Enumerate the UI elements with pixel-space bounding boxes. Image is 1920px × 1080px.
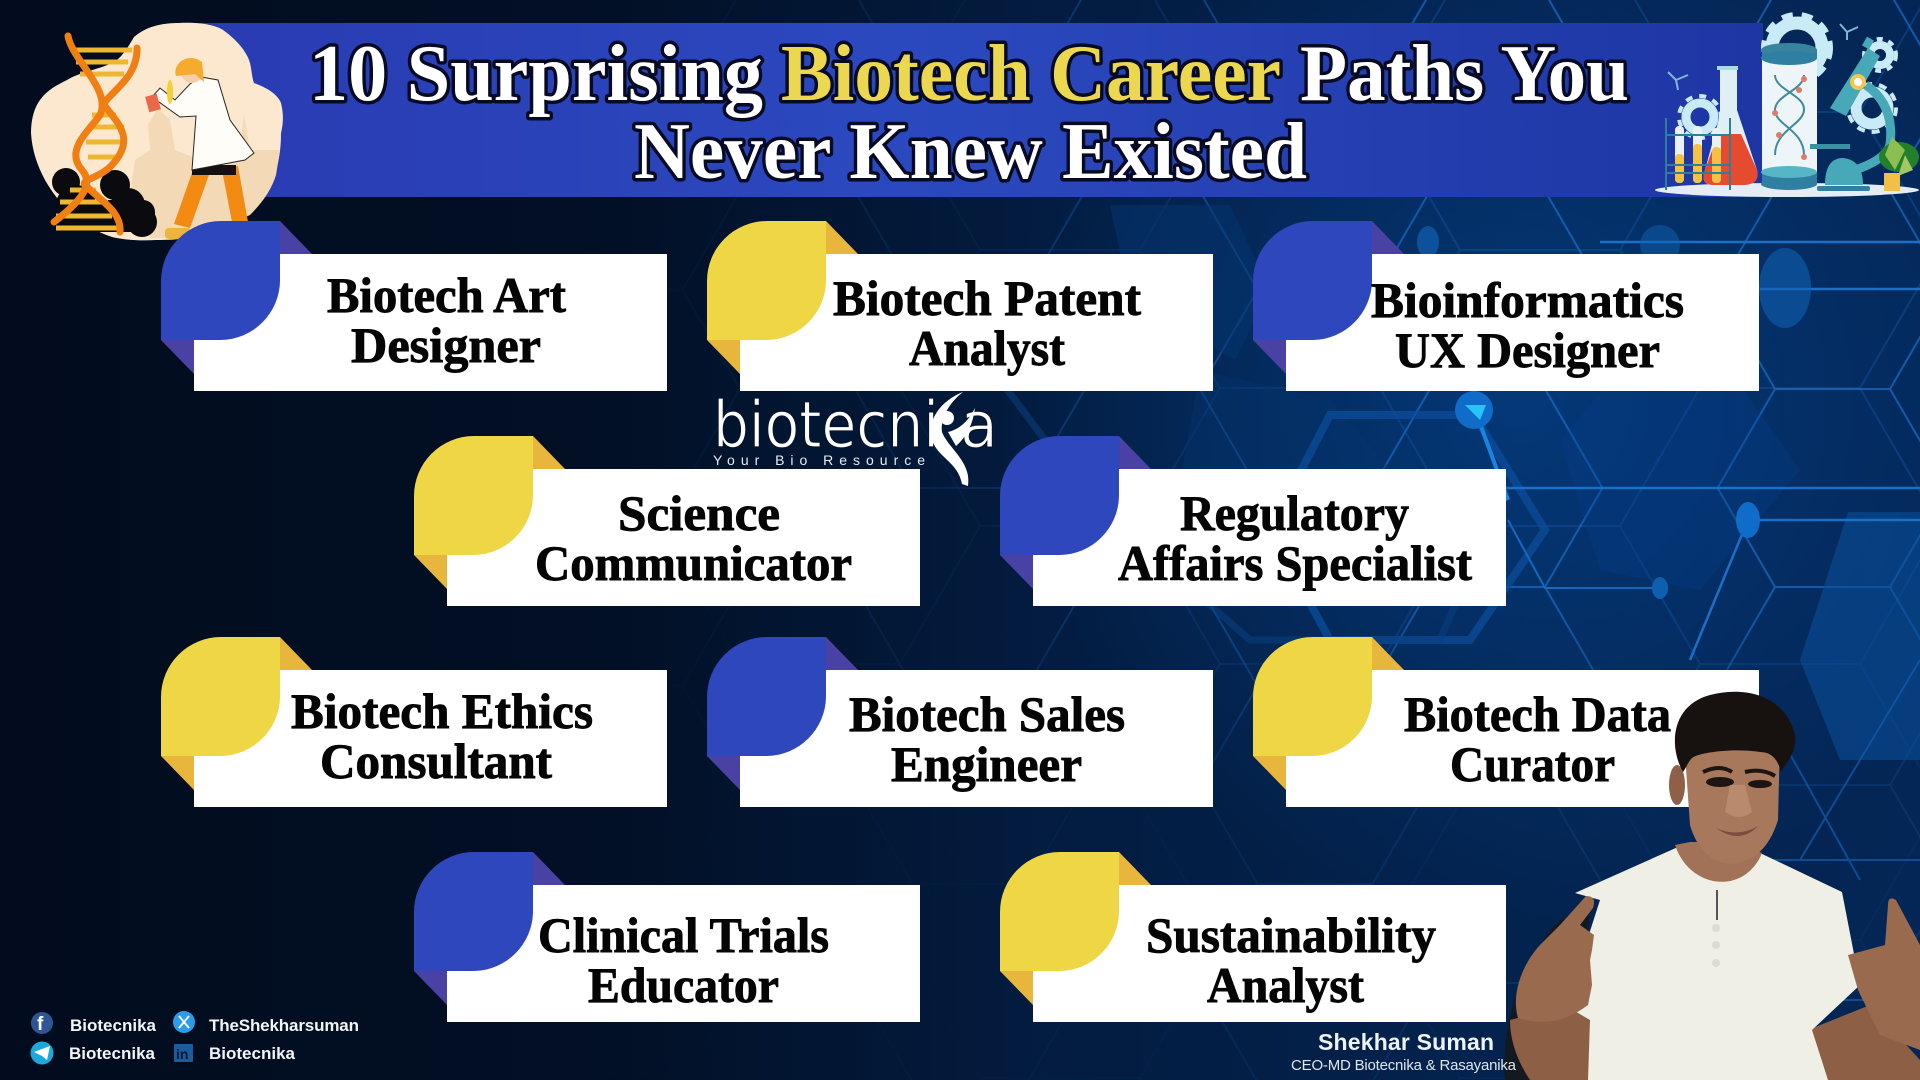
- card: Clinical Trials Educator: Clinical Trials: [538, 907, 829, 963]
- card: Science Communicator: [414, 436, 920, 606]
- card: Clinical Trials Educator: [414, 852, 920, 1022]
- card: Biotech Patent Analyst: Analyst: [909, 320, 1065, 376]
- card: Bioinformatics UX Designer: UX Designer: [1395, 322, 1660, 378]
- card: Science Communicator: Science: [618, 485, 780, 541]
- card: Bioinformatics UX Designer: Bioinformatics: [1371, 272, 1684, 328]
- face: [1669, 765, 1685, 805]
- card: Biotech Art Designer: Biotech Art: [327, 267, 566, 323]
- title text: [309, 30, 1629, 196]
- icon: laboratory illustration: [1655, 15, 1919, 197]
- social links: Biotecnika: [69, 1044, 156, 1063]
- plant: [1879, 142, 1919, 172]
- card: Biotech Ethics Consultant: Consultant: [320, 733, 552, 789]
- left hand: [1516, 896, 1594, 1022]
- card: Biotech Sales Engineer: [707, 637, 1213, 807]
- card: Science Communicator: Communicator: [535, 535, 852, 591]
- card: Biotech Sales Engineer: Engineer: [891, 736, 1082, 792]
- card: Biotech Patent Analyst: Biotech Patent: [833, 270, 1141, 326]
- card: Biotech Art Designer: [161, 221, 667, 391]
- title text: Never Knew Existed: [634, 108, 1307, 196]
- shirt: [1566, 847, 1860, 1080]
- title text: 10 Surprising: [309, 30, 763, 118]
- card: Biotech Art Designer: Designer: [351, 317, 541, 373]
- card: Biotech Data Curator: Curator: [1450, 736, 1615, 792]
- presenter name: CEO-MD Biotecnika & Rasayanika: [1291, 1057, 1517, 1074]
- social links: [30, 1011, 359, 1064]
- social links: Biotecnika: [209, 1044, 296, 1063]
- icon: X: [173, 1011, 195, 1033]
- card: Sustainability Analyst: Analyst: [1207, 957, 1364, 1013]
- title text: Paths You: [1300, 30, 1629, 118]
- presenter name: [1291, 1029, 1517, 1074]
- cylinder: [1762, 50, 1817, 175]
- arms: [1510, 1000, 1605, 1080]
- social links: Biotecnika: [70, 1016, 157, 1035]
- background: navy gradient with hexagon network: [604, 0, 1920, 1080]
- logo: biotecnika: biotecni: [713, 389, 939, 463]
- card: Regulatory Affairs Specialist: Regulatory: [1180, 485, 1409, 541]
- right hand: [1848, 898, 1920, 1050]
- icon: facebook: f: [37, 1014, 44, 1035]
- card: Biotech Ethics Consultant: Biotech Ethics: [291, 683, 593, 739]
- title banner: [200, 23, 1763, 197]
- logo: biotecnika: a: [960, 389, 998, 463]
- icon: DNA and scientist illustration: [31, 23, 283, 240]
- card: Biotech Data Curator: [1253, 637, 1759, 807]
- logo: biotecnika: Your Bio Resource: [713, 452, 925, 468]
- card: Regulatory Affairs Specialist: [1000, 436, 1506, 606]
- card: Clinical Trials Educator: Educator: [588, 957, 779, 1013]
- flask: [1704, 68, 1758, 185]
- icon: linkedin: [174, 1044, 193, 1062]
- card: Biotech Ethics Consultant: [161, 637, 667, 807]
- card: Sustainability Analyst: [1000, 852, 1506, 1022]
- card: Regulatory Affairs Specialist: Affairs Specialist: [1118, 535, 1472, 591]
- person: presenter pointing at himself: [1504, 692, 1920, 1080]
- presenter name: Shekhar Suman: [1318, 1029, 1494, 1055]
- icon: telegram: [30, 1042, 54, 1064]
- social links: TheShekharsuman: [209, 1016, 359, 1035]
- card: Biotech Patent Analyst: [707, 221, 1213, 391]
- title text: Biotech Career: [781, 30, 1281, 118]
- logo: biotecnika: [713, 389, 998, 486]
- icon: facebook: [31, 1012, 53, 1035]
- hair: [1675, 692, 1795, 772]
- card: Biotech Data Curator: Biotech Data: [1404, 686, 1671, 742]
- card: Biotech Sales Engineer: Biotech Sales: [849, 686, 1125, 742]
- microscope: [1830, 48, 1880, 116]
- card: Sustainability Analyst: Sustainability: [1146, 907, 1436, 963]
- card: Bioinformatics UX Designer: [1253, 221, 1759, 391]
- icon: linkedin: in: [176, 1046, 188, 1062]
